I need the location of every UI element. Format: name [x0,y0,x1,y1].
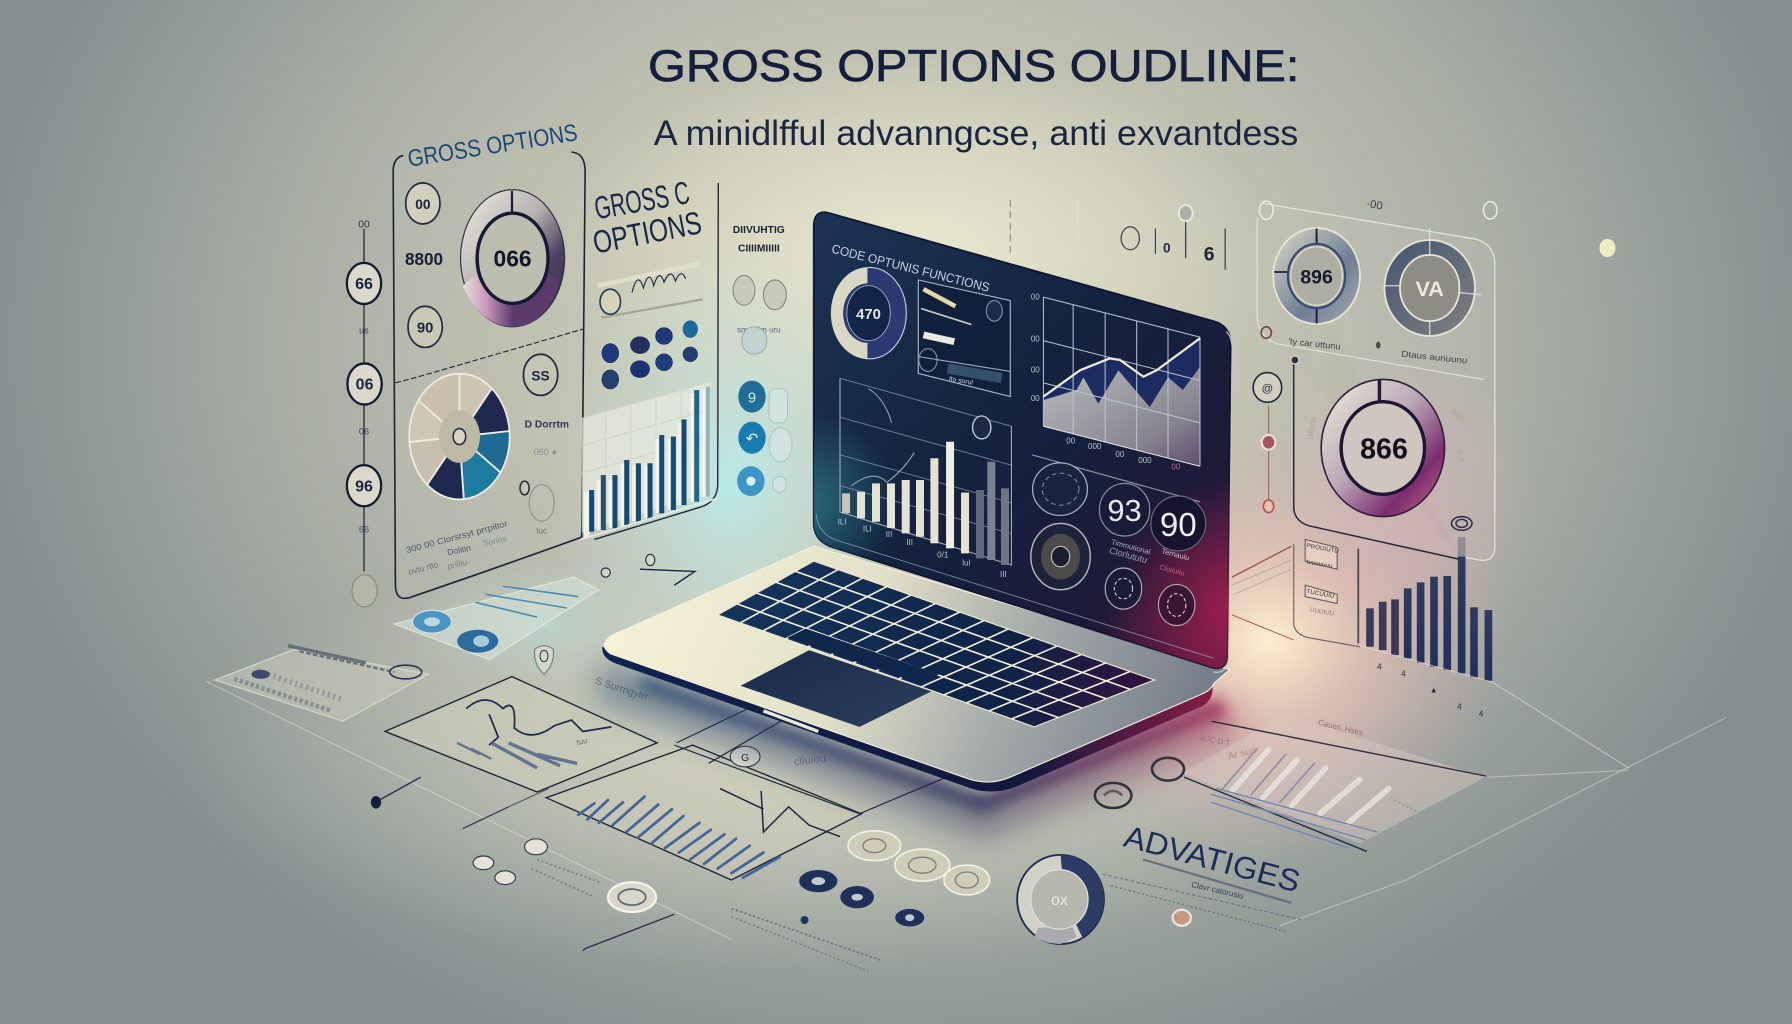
small icons by cards [601,554,655,577]
screen line chart: 000 [1138,456,1152,465]
screen line chart: 00 [1066,436,1076,445]
swirl icons by report [1095,758,1184,808]
tick strokes [583,914,674,951]
left timeline [347,219,382,607]
outline icon pair [733,275,786,310]
screen bar chart: ILI [863,524,872,533]
screen bar chart [838,378,1011,579]
grey caption strokes [531,859,880,971]
laptop wide shadow [594,663,1240,837]
right bar chart: 4 [1479,710,1484,719]
screen bar chart: 0/1 [937,551,949,560]
middle card heading [590,174,704,261]
faint gauge annotations: o u [1455,449,1468,463]
small badge 2 [408,306,442,347]
timeline node 3 [347,465,381,506]
screen stat 90 [1151,496,1206,551]
screen dial 4 [1158,584,1195,626]
document: right stripes report: Ar sus [1227,745,1257,763]
gauge 896 [1273,228,1360,324]
timeline node 4 faded [352,575,377,607]
laptop underside [602,647,1213,792]
screen dial 2 [1031,523,1090,590]
small badge 2: 90 [417,321,433,337]
screen bar chart: III [886,530,892,539]
screen line chart: 000 [1088,442,1102,451]
card outline [1263,203,1495,560]
left timeline: 00 [358,219,370,230]
faint gauge annotations: uiliuna [1305,415,1318,440]
panel: right upper card [1257,198,1497,560]
document: bar strokes chart [546,745,862,880]
blue icon 2 [738,422,766,454]
small icon [520,481,554,536]
floor guide lines [206,681,1726,939]
pill icons row [601,320,698,390]
small badge 3: SS [531,369,550,384]
faint gauge annotations: ouriu [1450,407,1468,426]
pie chart [409,374,510,499]
right mini table: PROUIUTU [1306,543,1340,555]
document: caption block near laptop: ciiuiou [793,752,827,769]
side caption: DIIVUHTIG [733,225,785,236]
screen line chart: 00 [1171,463,1181,472]
laptop base [604,546,1230,782]
gauge captions [1261,327,1468,366]
heading: advantages: ADVATIGES [1120,819,1304,899]
left timeline: us [359,326,369,336]
side caption [733,225,785,254]
bright dot [1599,239,1615,257]
right bar chart: 4 [1457,703,1462,712]
hanging icons above laptop: 6 [1204,244,1215,266]
space bar [787,629,939,683]
right bar chart: 4 [1377,663,1382,672]
faded icon [742,327,767,354]
card footnotes: ovtu rtto [407,559,440,577]
middle card outline [594,183,718,539]
trackpad [741,650,931,727]
pie legend: D Dorrtm [525,419,569,430]
screen bar chart: ILI [838,518,847,527]
screen captions: Clorlututu [1108,545,1148,565]
card footnotes: Dolitin [446,543,472,557]
pie legend [525,419,569,457]
orange dot [1173,910,1191,926]
mini caption: smauilm uru [737,326,781,335]
screen donut [831,267,906,359]
right mini table: TUCUUIU [1306,588,1335,600]
gauge captions: 'ty car uttunu [1288,336,1341,352]
laptop screen [800,212,1246,686]
big gauge 866: 866 [1360,433,1408,465]
document: right stripes report: Caues. Hstrs [1317,718,1364,738]
keyboard [718,561,1154,727]
gauge 896: 896 [1300,266,1333,288]
blue icon 2: ↶ [746,431,758,447]
right mini timeline: @ [1262,383,1273,395]
small badge 1 [406,183,440,224]
document: caption block near laptop: G [741,753,749,764]
screen bar chart: III [906,538,913,547]
middle card heading: OPTIONS [590,204,704,261]
blue icon 1: 9 [748,390,756,406]
small badge 3 [523,354,558,395]
bottom gauge [1017,855,1104,944]
panel: gross options middle card [581,174,718,539]
location pin [534,646,554,674]
screen donut: 470 [856,307,881,323]
screen line chart: 00 [1031,366,1040,375]
sketch strip [598,264,703,318]
screen line chart: 00 [1031,394,1040,403]
lower card outline [1294,360,1463,560]
laptop hinge notch [763,711,818,731]
screen dial 3 [1105,568,1142,609]
blue icon 1 [738,381,766,413]
swirl icon [1451,517,1472,530]
middle card bar chart [581,382,718,539]
screen stat 90: 90 [1160,507,1197,544]
gauge with glyph: VA [1415,276,1444,301]
small badge 1: 00 [415,197,431,212]
screen bar chart: III [1000,570,1007,579]
corner rings [1259,201,1497,219]
timeline node 3: 96 [355,478,373,495]
screen list panel: Ito sorul [948,376,974,387]
pale companion icons [769,389,792,493]
card heading: GROSS OPTIONS [406,119,579,173]
left timeline: 66 [359,525,369,535]
right mini table: UUUIUU [1309,607,1335,618]
screen line chart: 00 [1115,450,1125,459]
card footnotes: prilitu [446,557,469,571]
right bar chart: 4 [1401,670,1406,679]
side column beside laptop [733,225,792,496]
screen captions: Ternaulu [1161,546,1190,562]
timeline node 1 [347,263,381,304]
hanging icons above laptop: 0 [1163,241,1171,256]
timeline mid node [1262,435,1275,450]
screen list panel [918,280,1010,397]
middle card heading: GROSS C [592,174,692,226]
laptop close shadow [640,674,1229,814]
ring badge [608,882,656,912]
advantages caption [1103,859,1303,931]
title: GROSS OPTIONS OUDLINE: [648,42,1299,91]
timeline node 2: 06 [356,377,374,394]
screen line chart [1031,292,1200,472]
gauge with glyph [1384,229,1481,336]
screen body [814,212,1231,668]
pie legend: 060 ● [534,447,557,457]
document: sketched line chart [385,677,657,792]
timeline node 2 [347,363,382,405]
screen title: CODE OPTUNIS FUNCTIONS [830,242,991,295]
screen captions: Cloiluliu [1158,562,1186,578]
laptop [594,212,1246,837]
document: caption block near laptop: S Surrngytrr [593,676,650,704]
subtitle: A minidlfful advanngcse, anti exvantdess [654,113,1298,153]
document: right stripes report [1183,714,1486,851]
right bar chart: ▲ [1430,686,1438,695]
small label: 8800 [405,249,443,269]
heading: advantages [1103,819,1304,931]
card footnotes: 300 00 Clorsrsyt prrpiltor [405,518,509,555]
document: right stripes report: A /C D T. [1200,734,1232,748]
heading: advantages: Clavr catorusiu [1190,880,1244,901]
blue icon 3 [737,466,765,496]
lower icon clusters [371,777,990,971]
hanging icons above laptop [1010,200,1225,270]
card footnotes: Sorins [482,533,508,548]
donut gauge [461,190,565,327]
screen dial 1 [1033,463,1087,515]
document: caption block near laptop [593,676,960,814]
timeline top node [1253,373,1282,402]
donut gauge: 066 [494,245,532,271]
screen stat 93: 93 [1107,493,1142,528]
timeline bottom node [1263,500,1274,513]
left timeline: 06 [359,426,369,436]
ambient glows [183,57,1537,971]
screen captions: Timmutional [1110,537,1152,556]
card footnotes [405,518,509,577]
gauge captions: Dtaus auriuunu [1401,349,1468,366]
blue floor card [394,577,599,659]
big gauge 866 [1321,379,1445,517]
document: left faded report [215,646,429,721]
faint gauge annotations [1305,407,1468,463]
right mini table: tuuuuuuu [1306,559,1333,570]
panel: gross options left card [393,119,585,598]
screen line chart: 00 [1031,292,1040,301]
right bar chart [1358,537,1629,768]
right mini timeline [1253,373,1282,513]
right mini table [1232,539,1360,647]
timeline node 1: 66 [355,276,373,293]
small cards under left panels [394,554,695,674]
screen divider [1032,455,1200,502]
screen bar chart: lul [962,559,971,568]
small icon: tuc [536,527,547,536]
navy ring icons [799,870,925,927]
card outline [393,152,585,598]
screen line chart: 00 [1031,335,1040,344]
bottom gauge: ox [1051,892,1068,909]
screen captions [1108,537,1190,578]
side caption: CIIIIMIIIII [738,243,780,254]
left small dots [473,839,547,885]
screen stat 93 [1099,483,1150,536]
panel: right upper card: ·00 [1365,198,1384,213]
pale ring icons [848,831,990,895]
card divider [395,329,583,383]
document: sketched line chart: tuu [576,736,588,747]
panel: right lower card [1291,356,1472,560]
